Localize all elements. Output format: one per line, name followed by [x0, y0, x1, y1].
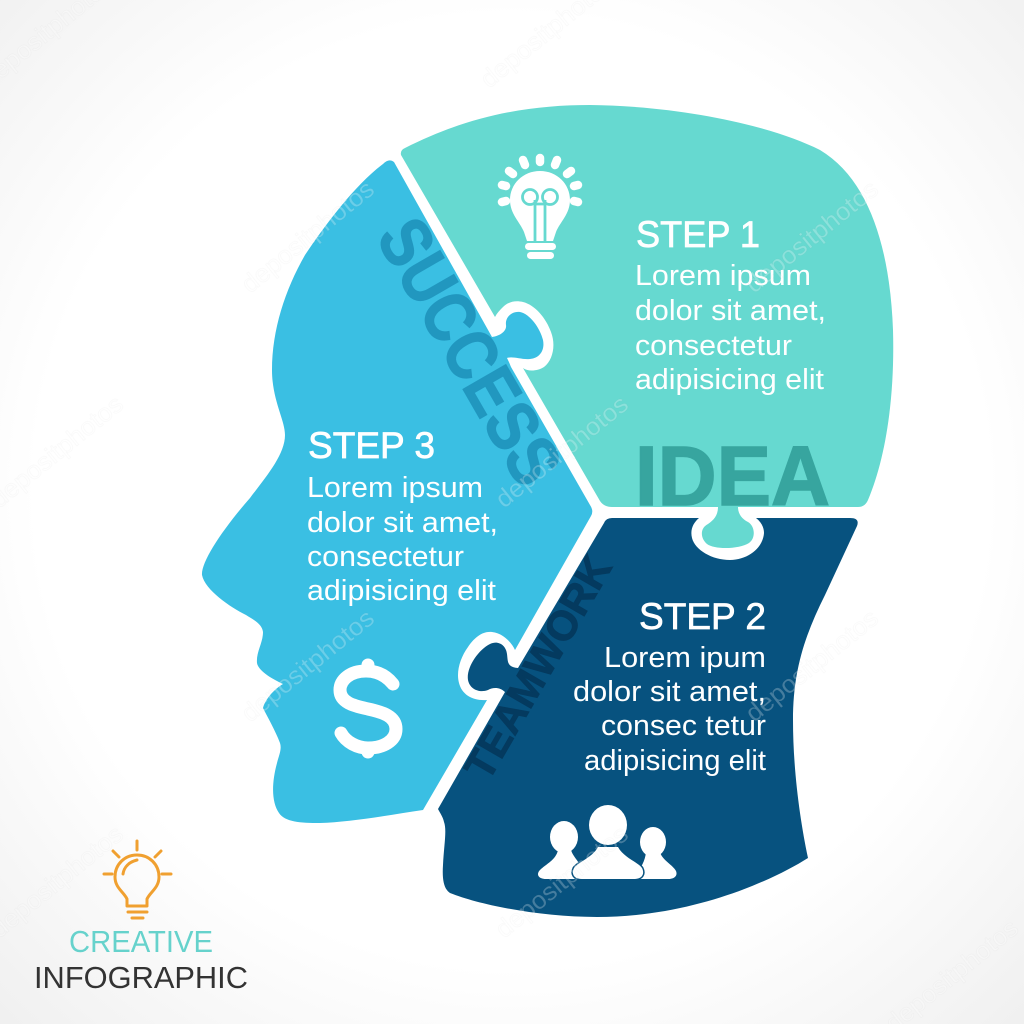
heading: SUCCESS: SUCCESS [361, 205, 577, 499]
panel: step 1 teal brain [401, 105, 893, 548]
panel: step 3 blue face [202, 160, 592, 823]
icon: light bulb [502, 158, 578, 259]
text block: step 1 [635, 214, 826, 396]
icon: three people [538, 805, 677, 879]
text block: step 2: dolor sit amet, [573, 676, 766, 708]
watermark: depositphotos [236, 604, 380, 728]
heading: TEAMWORK: TEAMWORK [455, 547, 621, 788]
text block: step 2: Lorem ipum [604, 642, 766, 674]
watermark: depositphotos [740, 604, 884, 728]
text block: step 2: adipisicing elit [584, 745, 766, 777]
navy puzzle piece [438, 518, 858, 917]
text block: step 3: consectetur [307, 541, 465, 573]
text block: step 3: STEP 3 [308, 425, 435, 466]
logo: creative infographic [34, 841, 248, 995]
watermark: depositphotos [490, 390, 634, 514]
text block: step 2: STEP 2 [639, 596, 766, 637]
text block: step 3: adipisicing elit [307, 575, 496, 607]
icon: orange light bulb [104, 841, 171, 918]
text block: step 2 [573, 596, 767, 777]
text block: step 3 [307, 425, 498, 607]
teal puzzle piece [401, 105, 893, 548]
text block: step 2: consec tetur [601, 710, 767, 742]
blue puzzle piece [202, 160, 592, 823]
watermark: depositphotos [236, 175, 380, 299]
panel: step 2 navy neck [438, 518, 858, 917]
text block: step 1: dolor sit amet, [635, 295, 826, 327]
icon: dollar sign [340, 665, 396, 752]
text block: step 3: dolor sit amet, [307, 507, 498, 539]
label: INFOGRAPHIC: INFOGRAPHIC [34, 960, 248, 995]
label: CREATIVE: CREATIVE [69, 924, 213, 959]
heading: IDEA: IDEA [635, 429, 830, 523]
watermark: depositphotos [740, 175, 884, 299]
watermark: depositphotos [490, 820, 634, 944]
text block: step 3: Lorem ipsum [307, 472, 483, 504]
text block: step 1: Lorem ipsum [635, 260, 811, 292]
text block: step 1: consectetur [635, 330, 793, 362]
text block: step 1: STEP 1 [636, 214, 760, 255]
text block: step 1: adipisicing elit [635, 364, 824, 396]
